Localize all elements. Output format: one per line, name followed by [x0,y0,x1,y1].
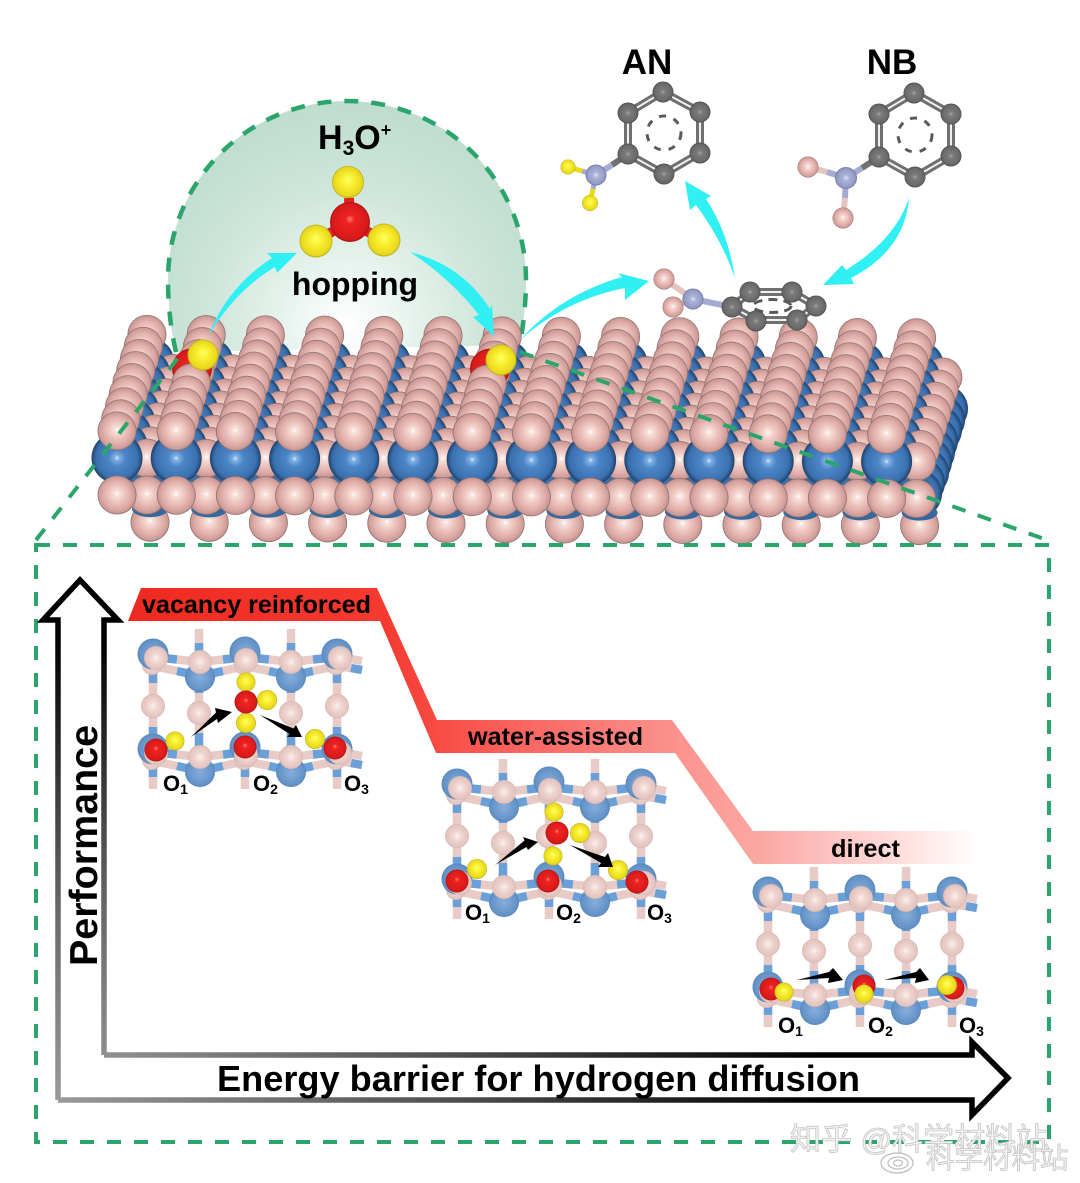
label: vacancy reinforced: vacancy reinforced [142,591,371,619]
watermark line 2: 科学材料站 [926,1143,1069,1175]
site labels: 3 [976,1023,984,1039]
site labels: O [868,1013,885,1038]
site labels: O [163,771,180,796]
catalyst slab [92,315,968,545]
energy axis arrow [58,1042,1008,1115]
front lower row [98,475,906,518]
panel: direct structure [752,867,984,1039]
label: water-assisted: water-assisted [467,723,643,751]
perspective dashed line right [520,352,1047,540]
arrow: hop up [208,253,297,336]
site labels: O [344,771,361,796]
arrows [191,708,302,737]
hydrogen at sites [774,975,957,1004]
hopping dome [168,101,526,352]
site labels: O [465,900,482,925]
NB label: NB [867,43,917,82]
H3O+ label: 3 [343,137,354,160]
site labels: 1 [180,781,188,797]
pink columns over oxygen [160,363,507,440]
label: direct: direct [831,835,901,863]
front blue atoms [92,432,912,487]
dome outline [168,101,526,352]
arrow: to adsorbed molecule [520,273,649,340]
AN molecule [560,82,710,211]
middle interstitial pink row [128,439,936,481]
site labels: 3 [361,781,369,797]
hydronium intermediate [544,802,590,866]
arrows [797,968,929,983]
site labels: O [556,900,573,925]
front pink atoms [98,411,906,454]
hopping label: hopping [292,266,418,302]
site labels: 1 [795,1023,803,1039]
arrow: to AN [685,181,735,278]
hydronium intermediate [234,672,277,733]
arrow: hop down [410,252,494,336]
performance axis arrow [43,580,118,1100]
NB molecule [798,82,962,228]
oxygen sites [446,870,648,894]
slab right side [894,384,968,518]
adsorbed molecule on slab [654,268,826,332]
site labels: O [253,771,270,796]
blue slivers [132,501,938,521]
arrow: from NB [823,198,909,285]
H3O+ label: + [381,120,391,140]
detail panel frame [36,545,1049,1142]
watermark icon [881,1153,913,1173]
site labels [163,771,369,797]
performance axis label: Performance [63,725,106,966]
site labels [778,1013,984,1039]
panel: water-assisted structure [442,759,672,926]
oxygen sites [144,736,346,762]
slab top rows [101,315,962,473]
center mid atom [848,933,872,957]
adsorbed oxygen right [470,349,510,389]
H3O+ label: O [354,119,381,157]
H3O+ label: H [318,119,343,157]
site labels: 3 [664,910,672,926]
site labels: O [778,1013,795,1038]
center mid atom [536,824,560,848]
lattice [442,759,666,919]
site labels: 2 [573,910,581,926]
panel: vacancy reinforced structure [138,629,369,797]
energy axis label: Energy barrier for hydrogen diffusion [217,1058,860,1099]
site labels: O [959,1013,976,1038]
blue strip [130,468,930,486]
lattice [752,867,977,1027]
site labels: 2 [270,781,278,797]
AN label: AN [622,43,672,82]
rear lower row [128,476,936,518]
hydrogen at sites [166,729,325,750]
lower pink row [130,503,939,545]
site labels [465,900,672,926]
watermark line 1: 知乎 @科学材料站 [790,1122,1047,1157]
site labels: 2 [885,1023,893,1039]
adsorbed hydrogen right [486,344,516,376]
arrows [495,837,613,867]
adsorbed hydrogen left [188,340,218,370]
lattice [138,629,362,789]
site labels: O [647,900,664,925]
H3O+ molecule [300,166,400,258]
adsorbed oxygen left [172,348,212,388]
site labels: 1 [482,910,490,926]
energy staircase band [128,588,978,864]
perspective dashed line left [36,358,178,540]
hydrogen at sites [467,859,628,880]
oxygen sites [760,974,964,1000]
